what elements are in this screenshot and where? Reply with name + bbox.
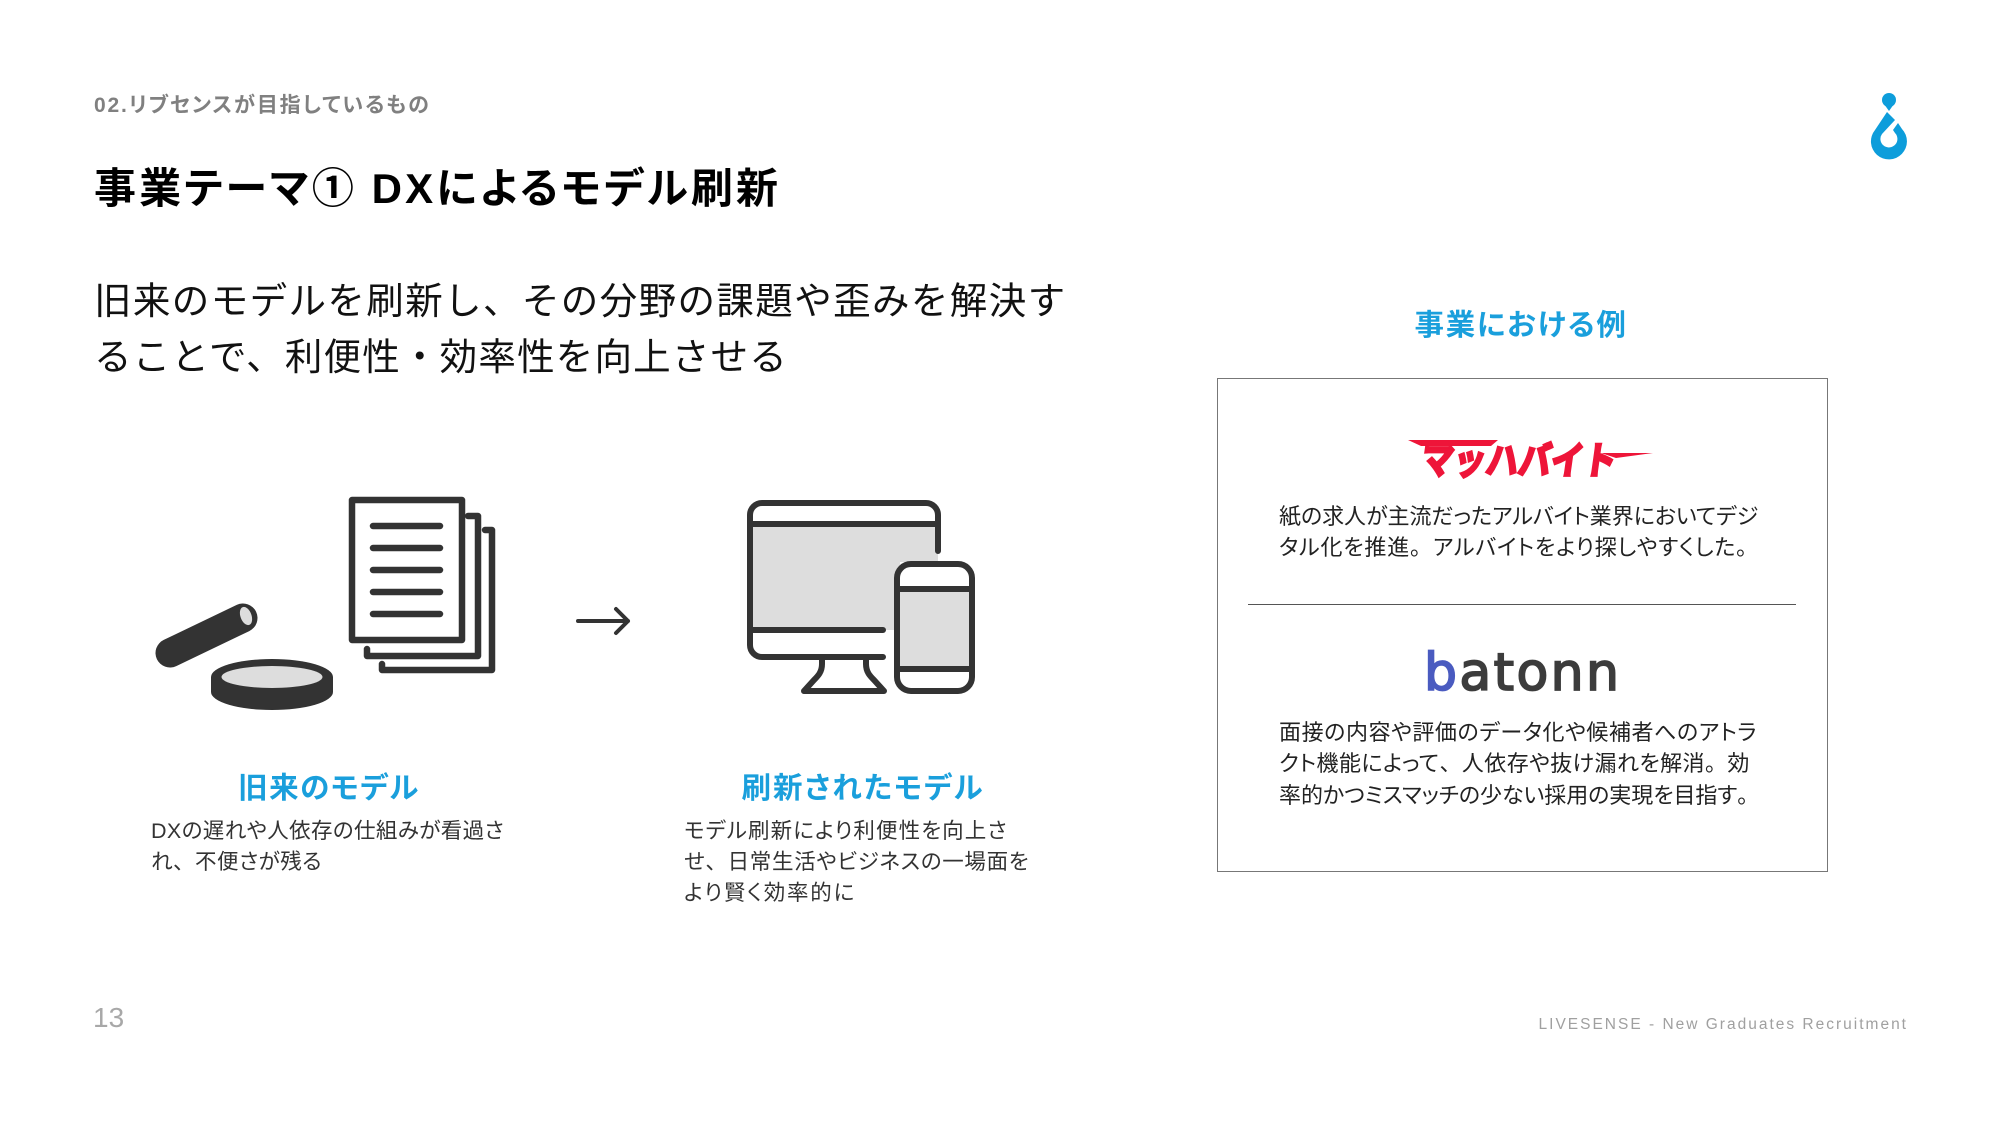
page number: 13 xyxy=(93,1002,124,1033)
icon: new model, monitor and smartphone xyxy=(747,500,975,694)
text: new model description xyxy=(684,819,1029,905)
arrow xyxy=(576,606,630,636)
text: batonn description: 面接の内容や評価のデータ化や候補者へのアトラ xyxy=(1279,720,1757,745)
text: Mach Baito description: 紙の求人が主流だったアルバイト業界においてデジ xyxy=(1279,504,1758,528)
lead text: 旧来のモデルを刷新し、その分野の課題や歪みを解決す xyxy=(94,280,1066,322)
text: old model description xyxy=(151,819,504,874)
icon: old model, stamp and paper documents xyxy=(156,496,496,710)
heading: new model: 刷新されたモデル xyxy=(741,772,985,805)
lead text xyxy=(94,280,1066,378)
stacked documents xyxy=(352,500,492,670)
section label: 02.リブセンスが目指しているもの xyxy=(94,94,431,117)
text: old model description: れ、不便さが残る xyxy=(151,850,322,874)
text: batonn description: クト機能によって、人依存や抜け漏れを解消。効 xyxy=(1279,751,1750,776)
text: old model description: DXの遅れや人依存の仕組みが看過さ xyxy=(151,819,504,843)
text: new model description: モデル刷新により利便性を向上さ xyxy=(684,819,1008,843)
stamp base xyxy=(211,659,333,710)
monitor xyxy=(750,503,938,691)
text: batonn description xyxy=(1279,720,1759,808)
stamp handle xyxy=(170,605,254,653)
text: batonn description: 率的かつミスマッチの少ない採用の実現を目指す。 xyxy=(1279,783,1759,808)
lead text: ることで、利便性・効率性を向上させる xyxy=(94,336,788,378)
title: 事業テーマ① DXによるモデル刷新 xyxy=(94,165,781,212)
text: Mach Baito description: タル化を推進。アルバイトをより探しやすくした。 xyxy=(1279,535,1759,560)
panel: business examples xyxy=(1217,378,1828,872)
logo: Mach Baito: マッハバイト xyxy=(1418,440,1619,483)
text: new model description: せ、日常生活やビジネスの一場面を xyxy=(684,850,1029,874)
smartphone xyxy=(897,564,972,691)
divider xyxy=(1248,604,1796,605)
heading: examples: 事業における例 xyxy=(1414,309,1628,342)
text: Mach Baito description xyxy=(1279,504,1759,560)
footer text: LIVESENSE - New Graduates Recruitment xyxy=(1539,1016,1908,1033)
heading: old model: 旧来のモデル xyxy=(238,772,420,805)
text: new model description: より賢く効率的に xyxy=(684,881,856,905)
icon: brand drop logo xyxy=(1870,93,1907,160)
